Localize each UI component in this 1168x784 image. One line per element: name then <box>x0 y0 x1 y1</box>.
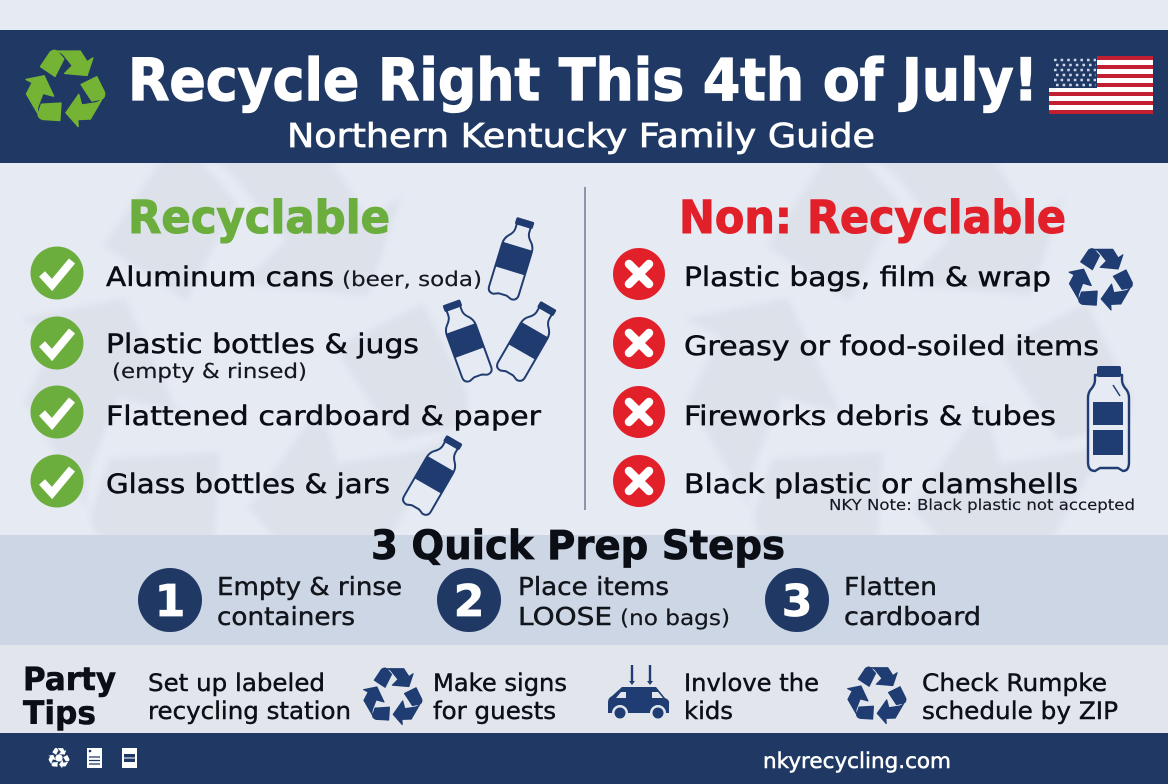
panel: non-recyclable <box>613 191 1137 514</box>
item: greasy: Greasy or food-soiled items <box>684 331 1099 362</box>
panel: recyclable <box>30 191 562 517</box>
step 1 <box>138 568 402 632</box>
panel: quick prep steps <box>0 523 1168 645</box>
heading: non-recyclable: Non: Recyclable <box>679 191 1066 244</box>
step 3: 3 <box>782 576 812 627</box>
icon: bottle 2 <box>437 297 493 383</box>
title: Recycle Right This 4th of July! <box>128 46 1038 114</box>
step 3: cardboard <box>844 602 981 631</box>
tip: signs: for guests <box>433 697 556 725</box>
icon: sheet <box>122 748 137 768</box>
step 1: 1 <box>155 576 185 627</box>
item: plastic bottles: (empty & rinsed) <box>112 359 307 383</box>
step 1: Empty & rinse <box>217 572 402 601</box>
icon: navy recycling symbol <box>1064 249 1137 313</box>
icon: green recycling symbol <box>20 50 111 130</box>
icon: small recycle <box>47 748 71 769</box>
step 3 <box>765 568 981 632</box>
tip: kids: Invlove the <box>684 669 819 697</box>
background watermark: recycling symbols <box>0 154 1166 607</box>
tip: recycling station <box>148 669 351 725</box>
subtitle: Northern Kentucky Family Guide <box>287 116 875 155</box>
heading: party tips: Tips <box>23 694 96 732</box>
icon: recycling symbol <box>359 668 427 727</box>
step 2: LOOSE <box>518 602 612 631</box>
item: glass <box>30 454 390 508</box>
icon: document <box>87 748 102 768</box>
item: aluminum cans <box>30 246 482 300</box>
heading: recyclable: Recyclable <box>128 191 390 244</box>
item: glass: Glass bottles & jars <box>106 469 390 500</box>
icon: American flag <box>1049 56 1153 114</box>
note: NKY Note: Black plastic not accepted <box>829 496 1135 514</box>
icon: recycling symbol 2 <box>843 667 911 726</box>
item: cardboard: Flattened cardboard & paper <box>106 401 542 432</box>
item: fireworks <box>613 386 1056 438</box>
item: black plastic <box>613 455 1078 507</box>
icon: upright bottle <box>1088 366 1129 471</box>
tip: schedule: schedule by ZIP <box>922 697 1118 725</box>
item: greasy <box>613 317 1099 369</box>
item: fireworks: Fireworks debris & tubes <box>684 401 1056 432</box>
icon: bottle 4 <box>401 432 468 517</box>
item: plastic bags <box>613 248 1051 300</box>
step 2: 2 <box>454 576 484 627</box>
step 1: containers <box>217 602 355 631</box>
heading: party tips <box>23 660 116 732</box>
divider <box>584 187 586 510</box>
heading: party tips: Party <box>23 660 116 698</box>
item: plastic bottles: Plastic bottles & jugs <box>106 329 419 360</box>
tip: schedule: Check Rumpke <box>922 669 1107 697</box>
tip: kids <box>684 669 819 725</box>
item: aluminum cans: (beer, soda) <box>342 267 482 291</box>
tip: schedule <box>922 669 1118 725</box>
tip: recycling station: recycling station <box>148 697 351 725</box>
step 2: Place items <box>518 572 669 601</box>
tip: kids: kids <box>684 697 733 725</box>
item: cardboard <box>30 386 542 438</box>
tip: signs <box>433 669 567 725</box>
step 3: Flatten <box>844 572 937 601</box>
heading: steps: 3 Quick Prep Steps <box>371 523 785 569</box>
item: black plastic: Black plastic or clamshells <box>684 469 1078 500</box>
icon: bottle 1 <box>487 215 540 301</box>
step 2: (no bags) <box>620 606 730 630</box>
panel: party tips <box>0 645 1168 733</box>
tip: signs: Make signs <box>433 669 567 697</box>
step 2 <box>437 568 730 632</box>
item: plastic bottles <box>30 316 419 383</box>
tip: recycling station: Set up labeled <box>148 669 325 697</box>
header banner <box>0 30 1168 163</box>
icon: van with arrows <box>608 665 669 721</box>
footer <box>0 733 1168 784</box>
item: aluminum cans: Aluminum cans <box>106 262 334 293</box>
item: plastic bags: Plastic bags, film & wrap <box>684 262 1051 293</box>
icon: bottle 3 <box>495 298 562 383</box>
website: nkyrecycling.com <box>763 749 951 773</box>
